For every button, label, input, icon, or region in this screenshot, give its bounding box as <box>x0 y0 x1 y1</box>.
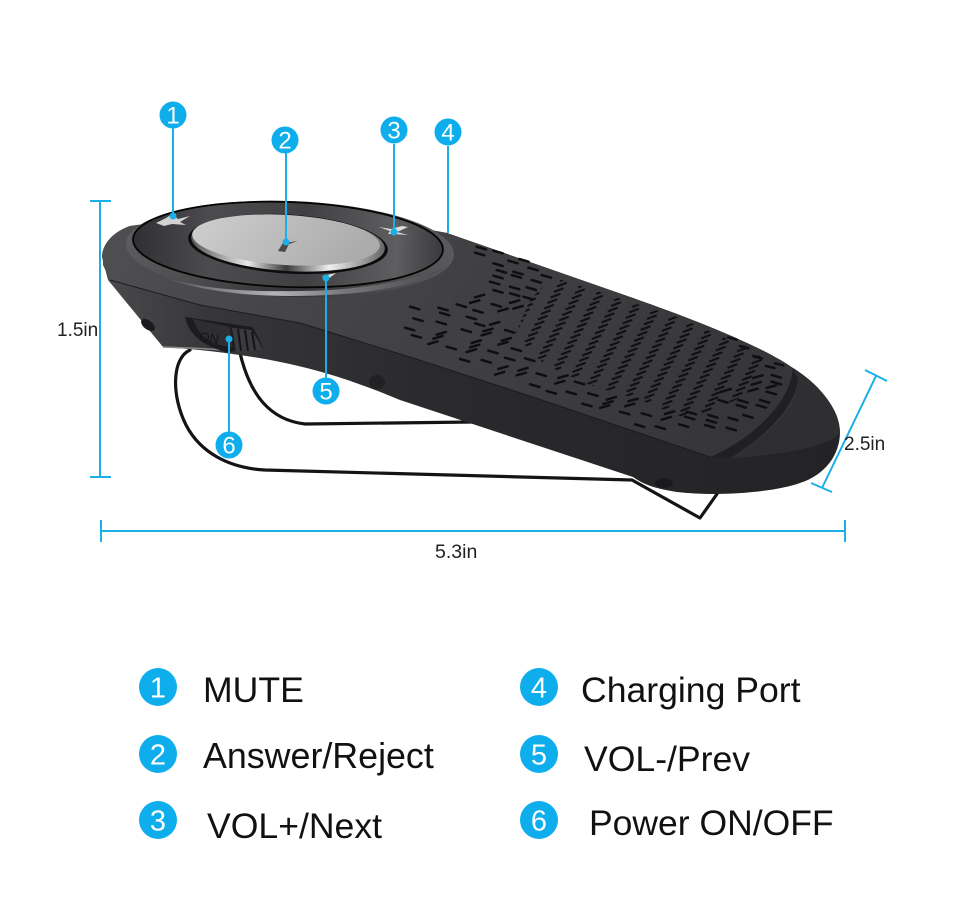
callout 6: 6 <box>222 432 236 460</box>
legend item 4: Charging Port <box>581 670 801 710</box>
callout 4: 4 <box>441 120 455 146</box>
callout 3: 3 <box>387 118 401 144</box>
callout 5: 5 <box>319 378 333 406</box>
legend item 6: 6 <box>531 806 547 838</box>
end cap divider <box>710 368 798 458</box>
power switch: ON <box>199 329 220 347</box>
metal button recess <box>186 208 390 280</box>
metal button rim <box>189 209 387 277</box>
end cap <box>730 368 840 458</box>
legend item 3: 3 <box>150 806 166 838</box>
legend item 6: Power ON/OFF <box>589 803 834 843</box>
icon: prev mark <box>322 273 336 279</box>
legend item 1 <box>139 668 304 710</box>
wire stand <box>176 350 717 518</box>
metal button <box>191 209 381 271</box>
body top face <box>103 204 838 457</box>
callout 2 <box>272 126 298 246</box>
icon: mute <box>156 214 190 226</box>
callout 1: 1 <box>166 102 180 130</box>
callout 1 <box>160 102 186 220</box>
button ring <box>124 195 456 303</box>
icon: next <box>379 226 408 235</box>
infographic canvas <box>58 102 888 839</box>
dimension: height: 1.5in <box>57 320 98 341</box>
legend item 5 <box>520 735 750 779</box>
ring highlight <box>160 268 445 296</box>
legend item 3: VOL+/Next <box>207 806 382 846</box>
legend item 5: 5 <box>531 740 547 772</box>
callout 6 <box>216 336 242 460</box>
legend item 1: 1 <box>150 672 166 704</box>
dimension: width: 2.5in <box>844 434 885 455</box>
legend item 3 <box>139 801 382 846</box>
speaker grille dense slots <box>516 280 762 416</box>
callout 5 <box>312 274 340 406</box>
legend <box>139 668 834 846</box>
speaker grille sparse slots <box>405 247 783 430</box>
control panel <box>132 197 444 292</box>
side button <box>369 375 385 389</box>
legend item 1: MUTE <box>203 670 304 710</box>
callout 2: 2 <box>278 128 292 154</box>
device body <box>102 195 840 494</box>
power switch <box>185 317 263 352</box>
dimension: height <box>57 201 111 477</box>
legend item 4: 4 <box>531 672 547 704</box>
mic hole <box>139 317 157 333</box>
dimension: length: 5.3in <box>435 541 477 563</box>
crease line <box>110 280 710 457</box>
dimension: length <box>101 520 845 563</box>
body side shell <box>102 204 840 494</box>
callout 4 <box>434 118 462 233</box>
callout 3 <box>380 116 408 236</box>
lower edge highlight <box>163 347 226 350</box>
legend item 5: VOL-/Prev <box>584 739 750 779</box>
icon: phone <box>278 241 298 252</box>
bottom screw <box>655 478 673 488</box>
legend item 2: Answer/Reject <box>203 736 434 776</box>
dimension: width <box>811 370 887 492</box>
legend item 2: 2 <box>150 740 166 772</box>
